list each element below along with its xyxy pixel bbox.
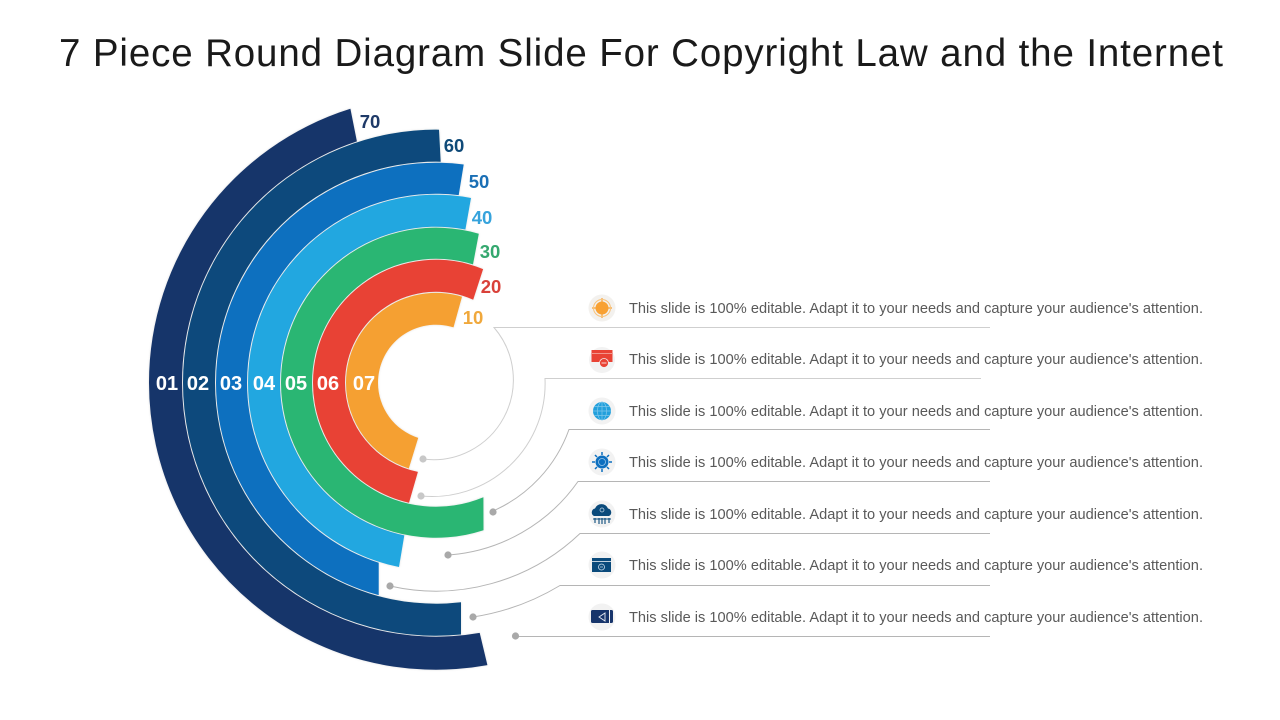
ring numbers: 06	[317, 373, 339, 395]
list row 4	[588, 448, 1203, 476]
ring numbers: 05	[285, 373, 307, 395]
ring 01: value 70	[149, 109, 487, 670]
list row 7	[588, 604, 1203, 630]
icon: cloud network	[588, 500, 616, 528]
icon: blue globe	[588, 398, 616, 424]
icon: orange sun target	[588, 294, 616, 322]
ring numbers: 07	[353, 373, 375, 395]
ring values: 40	[472, 207, 492, 228]
ring 05: value 30	[281, 228, 484, 538]
ring 03: value 50	[216, 163, 464, 595]
round diagram	[149, 109, 487, 670]
list row 5	[588, 500, 1203, 528]
row text: This slide is 100% editable. Adapt it to your needs and capture your audience's attention.	[629, 507, 1203, 523]
ring numbers: 04	[253, 373, 276, 395]
ring 04: value 40	[248, 195, 471, 567]
connector lines	[386, 328, 990, 640]
icon: video play tape	[588, 604, 616, 630]
list row 2	[589, 347, 1203, 373]
ring 06: value 20	[313, 260, 483, 503]
ring values: 20	[481, 276, 501, 297]
ring values: 30	[480, 241, 500, 262]
ring 07: value 10	[346, 293, 462, 468]
ring values: 50	[469, 171, 489, 192]
list row 6	[588, 552, 1203, 578]
row text: This slide is 100% editable. Adapt it to your needs and capture your audience's attention.	[629, 610, 1203, 626]
row text: This slide is 100% editable. Adapt it to your needs and capture your audience's attention.	[629, 301, 1203, 317]
list row 3	[588, 398, 1203, 424]
icon: blue gear	[588, 448, 616, 476]
ring numbers	[156, 373, 375, 395]
row text: This slide is 100% editable. Adapt it to your needs and capture your audience's attention.	[629, 352, 1203, 368]
ring values: 10	[463, 307, 483, 328]
list row 1	[588, 294, 1203, 322]
icon: red card	[589, 347, 615, 373]
ring values	[360, 111, 501, 328]
ring values: 70	[360, 111, 380, 132]
ring numbers: 01	[156, 373, 178, 395]
row text: This slide is 100% editable. Adapt it to your needs and capture your audience's attention.	[629, 404, 1203, 420]
ring 02: value 60	[183, 130, 461, 636]
ring numbers: 02	[187, 373, 209, 395]
ring numbers: 03	[220, 373, 242, 395]
row text: This slide is 100% editable. Adapt it to your needs and capture your audience's attention.	[629, 455, 1203, 471]
row text: This slide is 100% editable. Adapt it to your needs and capture your audience's attention.	[629, 558, 1203, 574]
ring values: 60	[444, 135, 464, 156]
title: 7 Piece Round Diagram Slide For Copyright Law and the Internet	[59, 32, 1223, 75]
icon: browser window	[588, 552, 616, 578]
